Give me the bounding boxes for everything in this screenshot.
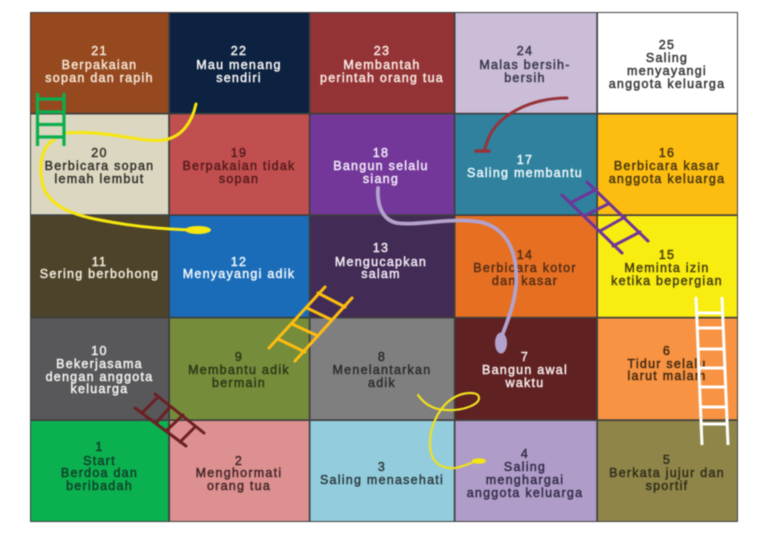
cell 6: 6 — [663, 344, 671, 358]
cell 2: 2 — [235, 454, 243, 468]
cell 3: Saling menasehati — [320, 473, 444, 487]
cell 4: Saling — [504, 460, 546, 474]
ladder: dark red from 1 to 10 — [135, 394, 204, 446]
cell 15 — [598, 216, 737, 317]
cell 21: 21 — [91, 44, 108, 58]
cell 20 — [31, 114, 168, 214]
cell 16 — [598, 114, 737, 214]
cell 9: Membantu adik — [188, 363, 290, 377]
cell 8: Menelantarkan — [333, 363, 431, 377]
cell 19: sopan — [219, 172, 259, 186]
cell 8: adik — [368, 376, 396, 390]
cell 16: Berbicara kasar — [614, 159, 720, 173]
cell 1: Berdoa dan — [61, 466, 138, 480]
cell 13: 13 — [373, 241, 389, 255]
snake: yellow from 22 to 12 — [41, 104, 211, 234]
cell 3: 3 — [378, 460, 386, 474]
cell 25: Saling — [646, 51, 688, 65]
cell 2: Menghormati — [196, 466, 282, 480]
cell 4 — [456, 421, 596, 521]
cell 20: lemah lembut — [54, 172, 145, 186]
ladder: green from 20 to 21 — [38, 93, 64, 146]
cell 11: Sering berbohong — [40, 267, 159, 281]
cell 1: beribadah — [66, 479, 133, 493]
cell 6: Tidur selalu — [627, 357, 707, 371]
snake: lilac from 18 to 7 — [378, 188, 516, 354]
cell 11 — [31, 216, 168, 317]
cell 4: anggota keluarga — [467, 486, 583, 500]
cell 7: 7 — [521, 350, 529, 364]
cell 7 — [456, 318, 596, 419]
snake: red from 24 to 17 — [476, 98, 567, 151]
cell 19: Berpakaian tidak — [182, 159, 296, 173]
cell 22 — [170, 13, 309, 113]
cell 25 — [598, 13, 737, 113]
cell 21: Berpakaian — [62, 58, 137, 72]
cell 13 — [310, 216, 454, 317]
cell 18 — [310, 114, 454, 214]
cell 9: 9 — [235, 350, 243, 364]
cell 8: 8 — [378, 350, 386, 364]
cell 22: sendiri — [216, 71, 262, 85]
cell 25: 25 — [659, 38, 675, 52]
cell 23: perintah orang tua — [320, 71, 444, 85]
cell 22: 22 — [231, 44, 247, 58]
cell 9 — [170, 318, 309, 419]
cell 12 — [170, 216, 309, 317]
cell 12: 12 — [231, 255, 247, 269]
cell 14: Berbicara kotor — [473, 261, 577, 275]
cell 9: bermain — [212, 376, 266, 390]
cell 13: Mengucapkan — [335, 255, 427, 269]
cell 24: 24 — [517, 44, 533, 58]
cell 14: dan kasar — [492, 274, 558, 288]
cell 21 — [31, 13, 168, 113]
cell 10: keluarga — [71, 382, 128, 396]
cell 23: 23 — [374, 44, 390, 58]
cell 18: siang — [363, 172, 399, 186]
cell 14: 14 — [517, 248, 533, 262]
cell 7: Bangun awal — [482, 363, 568, 377]
cell 25: anggota keluarga — [609, 77, 725, 91]
cell 19: 19 — [231, 146, 247, 160]
cell 14 — [456, 216, 596, 317]
cell 22: Mau menang — [196, 58, 282, 72]
cell 10: 10 — [91, 344, 108, 358]
cell 10: dengan anggota — [46, 370, 153, 384]
ladder: orange from 9 to 13 — [269, 287, 352, 361]
cell 19 — [170, 114, 309, 214]
cell 18: 18 — [373, 146, 389, 160]
cell 3 — [310, 421, 454, 521]
ladder: purple from 15 to 17 — [562, 182, 648, 253]
cell 15: ketika bepergian — [611, 274, 723, 288]
cell 24: bersih — [504, 71, 546, 85]
cell 20: 20 — [91, 146, 108, 160]
cell 10 — [31, 318, 168, 419]
cell 4: menghargai — [486, 473, 564, 487]
cell 21: sopan dan rapih — [45, 71, 154, 85]
cell 15: 15 — [659, 248, 675, 262]
cell 17: 17 — [517, 153, 533, 167]
cell 20: Berbicara sopan — [45, 159, 154, 173]
cell 25: menyayangi — [627, 64, 707, 78]
cell 6 — [598, 318, 737, 419]
cell 17: Saling membantu — [467, 166, 583, 180]
snake: yellow from 8 to 4 — [418, 393, 486, 468]
cell 15: Meminta izin — [624, 261, 710, 275]
cell 24 — [456, 13, 596, 113]
cell 2 — [170, 421, 309, 521]
cell 5: 5 — [663, 453, 671, 467]
ladder: white from 5 to 15 — [696, 297, 728, 445]
cell 7: waktu — [505, 376, 544, 390]
cell 1: Start — [83, 454, 116, 468]
cell 5: Berkata jujur dan — [609, 466, 725, 480]
cell 2: orang tua — [207, 479, 271, 493]
cell 1: 1 — [95, 440, 104, 454]
cell 10: Bekerjasama — [56, 357, 143, 371]
cell 5 — [598, 421, 737, 521]
cell 16: anggota keluarga — [609, 172, 725, 186]
cell 23: Membantah — [343, 58, 421, 72]
cell 12: Menyayangi adik — [183, 267, 295, 281]
cell 6: larut malam — [627, 369, 707, 383]
cell 24: Malas bersih- — [479, 58, 571, 72]
cell 5: sportif — [646, 479, 688, 493]
cell 17 — [456, 114, 596, 214]
cell 11: 11 — [92, 255, 107, 269]
cell 23 — [310, 13, 454, 113]
cell 16: 16 — [659, 146, 675, 160]
cell 8 — [310, 318, 454, 419]
cell 18: Bangun selalu — [333, 159, 429, 173]
cell 13: salam — [361, 267, 401, 281]
cell 4: 4 — [521, 447, 529, 461]
cell 1 — [31, 421, 168, 521]
